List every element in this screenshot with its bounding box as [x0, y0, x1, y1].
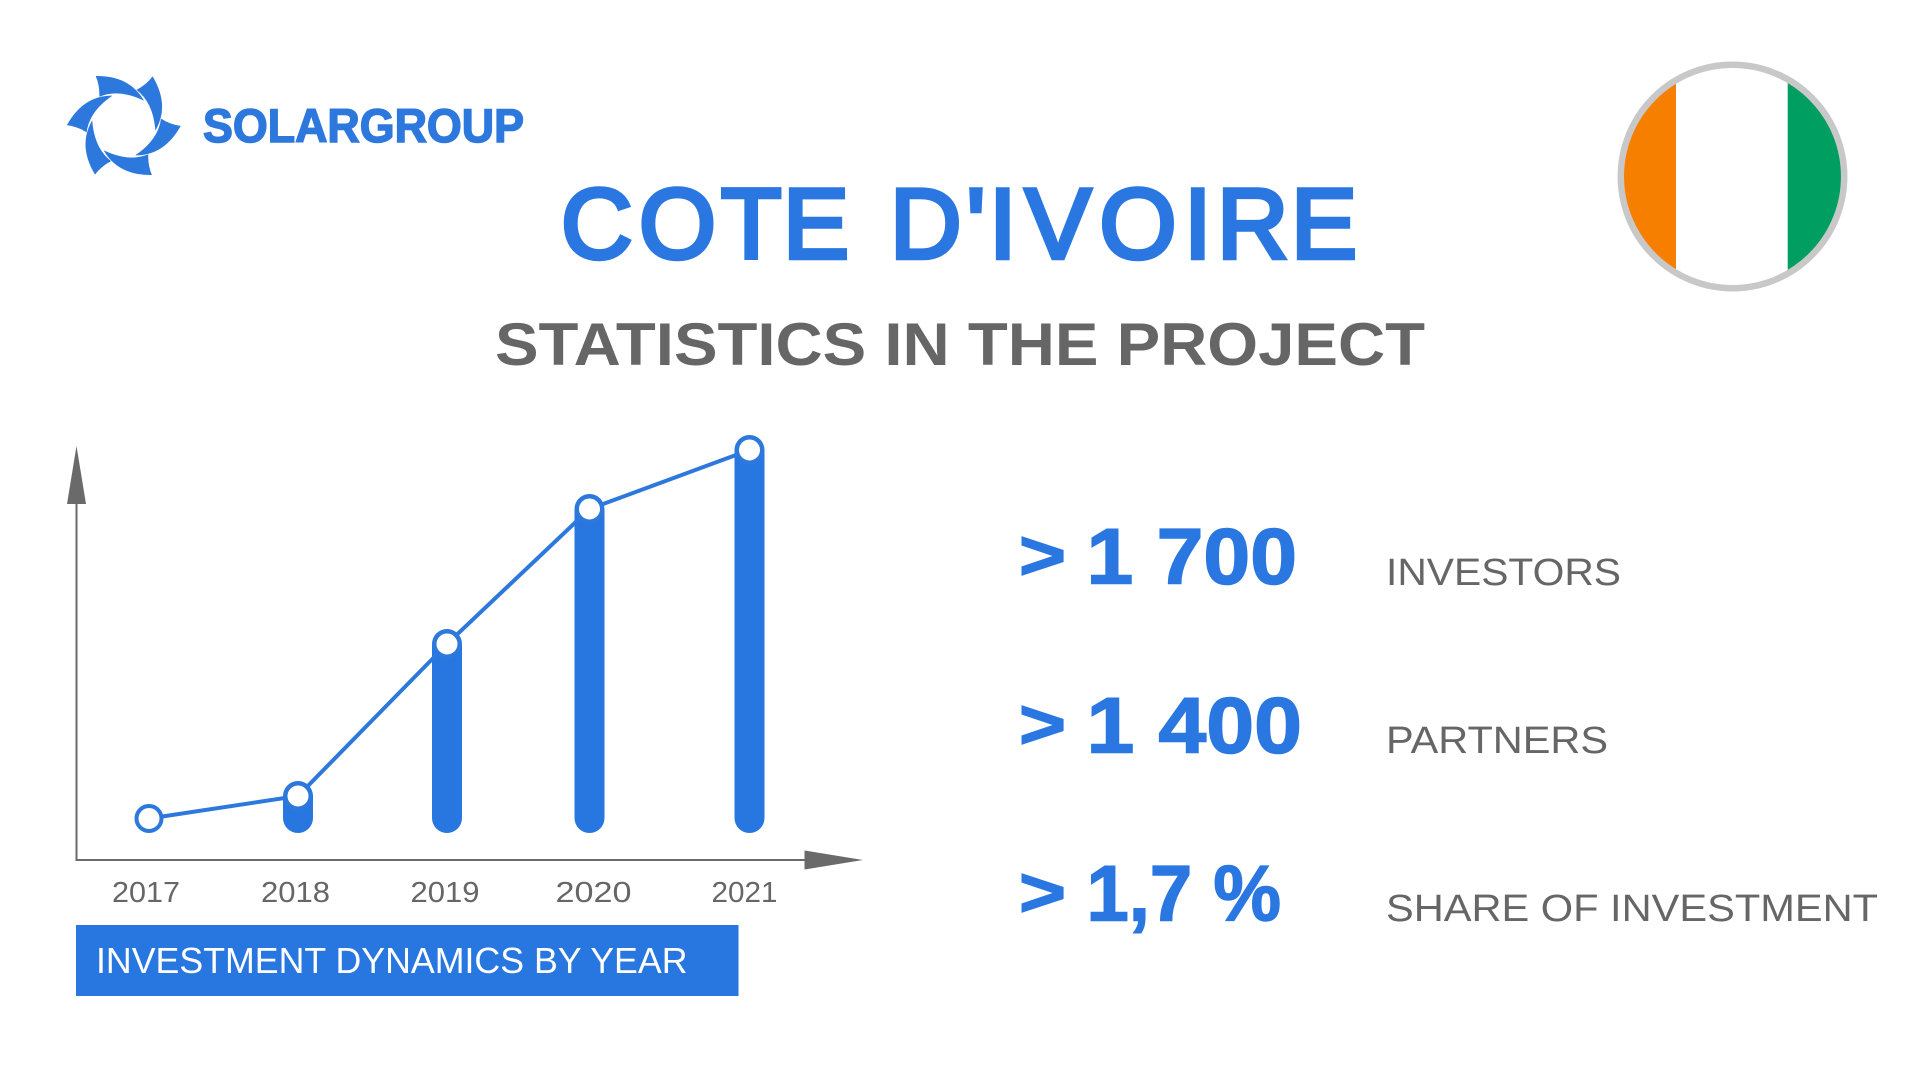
stat label: INVESTORS [1386, 552, 1621, 594]
stat: investors [1019, 512, 1621, 600]
title: COTE D'IVOIRE [561, 168, 1357, 279]
trend line [149, 450, 750, 818]
stat: partners [1019, 680, 1608, 770]
chart caption banner: INVESTMENT DYNAMICS BY YEAR [96, 940, 688, 981]
stat value: 1 400 [1086, 680, 1302, 770]
data point markers [136, 438, 762, 831]
stat label: PARTNERS [1386, 720, 1608, 762]
year labels [112, 877, 778, 909]
year labels: 2021 [712, 877, 778, 909]
subtitle: STATISTICS IN THE PROJECT [495, 310, 1425, 378]
year labels: 2020 [556, 877, 632, 909]
year labels: 2018 [261, 877, 330, 909]
x axis arrow [76, 850, 863, 870]
logo wordmark: SOLARGROUP [203, 99, 524, 152]
y axis arrow [67, 446, 86, 861]
chart: investment dynamics by year [67, 435, 863, 996]
stat: share of investment [1019, 848, 1878, 938]
stat comparison sign: > [1019, 685, 1066, 763]
year labels: 2017 [112, 877, 180, 909]
chart caption banner [76, 925, 738, 996]
year labels: 2019 [410, 877, 480, 909]
stat label: SHARE OF INVESTMENT [1386, 888, 1878, 930]
stat value: 1 700 [1086, 512, 1297, 600]
stat comparison sign: > [1019, 853, 1066, 931]
stat value: 1,7 % [1086, 848, 1281, 938]
icon: Cote d'Ivoire round flag [1620, 60, 1848, 300]
logo: SOLARGROUP [67, 76, 524, 175]
stat comparison sign: > [1019, 516, 1066, 594]
icon: six-blade sun logo [67, 76, 181, 175]
bars [283, 435, 764, 833]
